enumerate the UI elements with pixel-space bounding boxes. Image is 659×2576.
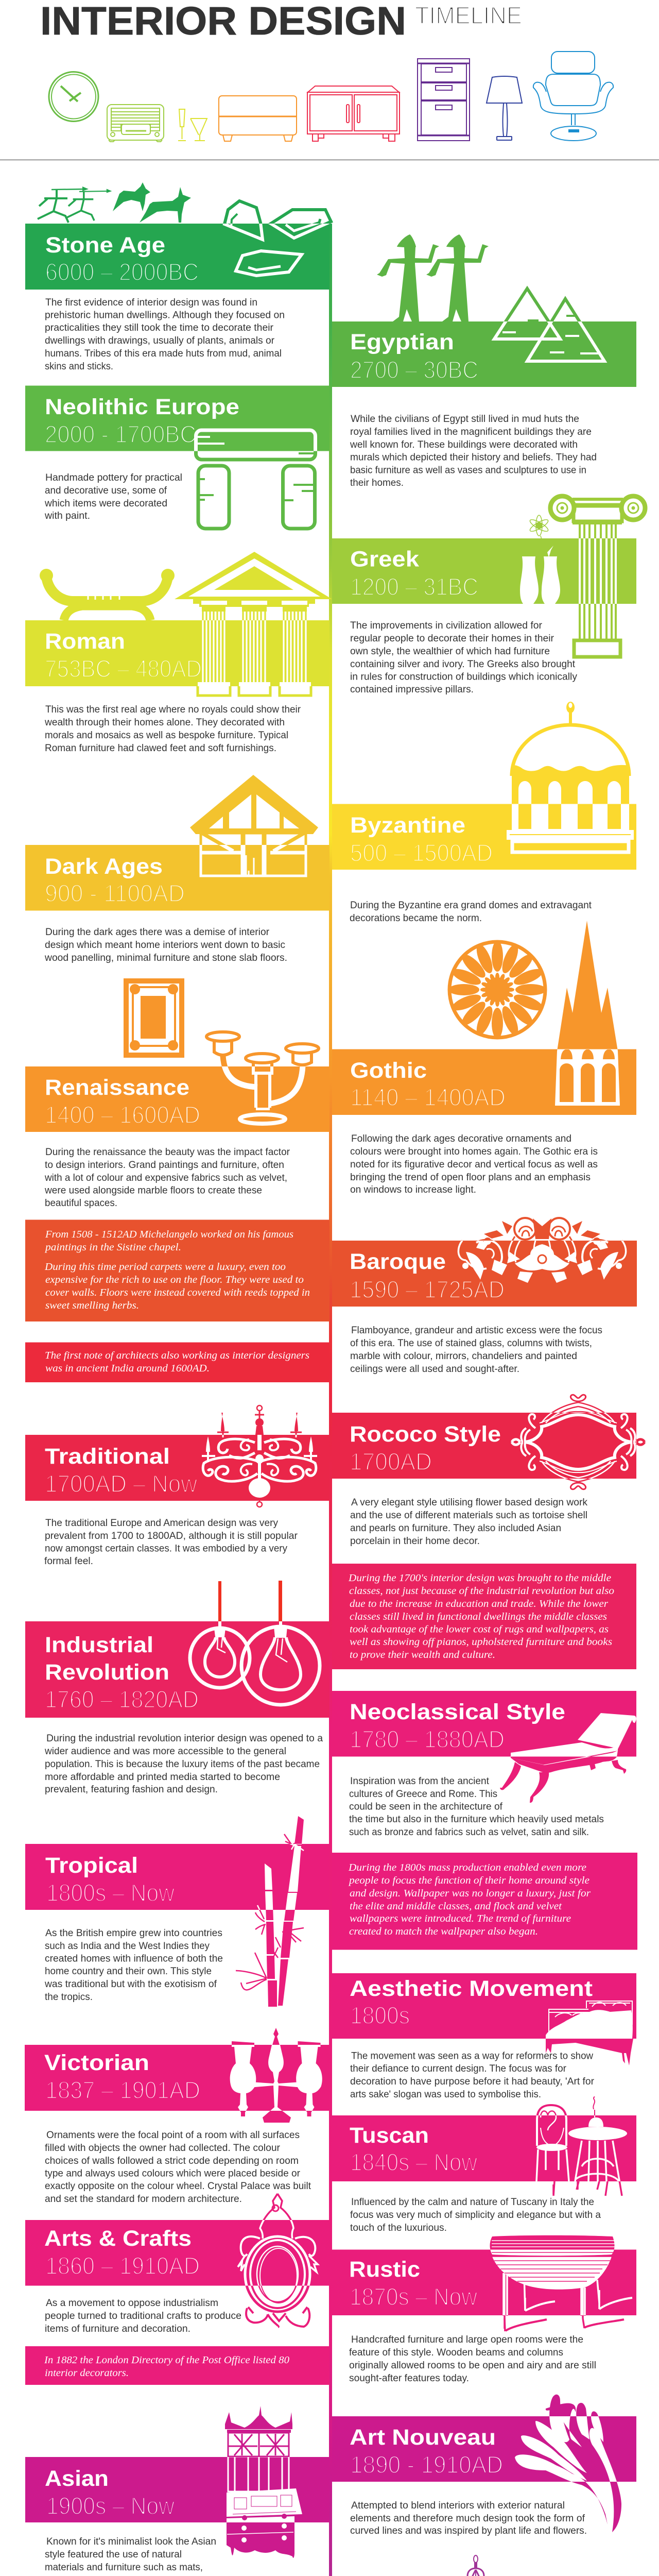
text: skins and sticks. (45, 361, 113, 372)
date: 2000 - 1700BC (45, 420, 196, 448)
text: and decorative use, some of (45, 485, 167, 496)
text: wealth through their homes alone. They decorated with (44, 717, 285, 728)
callout: 1700s middle classes: classes, not just because of the industrial revolution but also (349, 1585, 614, 1597)
icon: rustic table (490, 2235, 632, 2331)
text: to design interiors. Grand paintings and furniture, often (45, 1160, 284, 1171)
text (45, 2536, 216, 2576)
text: During the renaissance the beauty was the impact factor (45, 1147, 290, 1158)
text: regular people to decorate their homes in their (350, 633, 554, 644)
text: prevalent from 1700 to 1800AD, although it is still popular (45, 1531, 298, 1541)
text: prehistoric human dwellings. Although they focused on (45, 310, 285, 320)
callout: sistine chapel and carpets: paintings in the Sistine chapel. (44, 1242, 181, 1253)
panel: eclectic (332, 2555, 636, 2576)
heading: Rustic (349, 2257, 420, 2282)
callout: sistine chapel and carpets: From 1508 - 1512AD Michelangelo worked on his famous (45, 1229, 293, 1240)
band (332, 2115, 636, 2181)
text: own style, the wealthier of which had furniture (350, 646, 550, 657)
text: basic furniture as well as vases and sculptures to use in (350, 465, 586, 476)
text (44, 927, 287, 963)
text: formal feel. (44, 1556, 93, 1567)
icon: chandelier (202, 1405, 317, 1507)
date: 1780 – 1880AD (350, 1725, 505, 1753)
text: originally allowed rooms to be open and airy and are still (349, 2360, 596, 2371)
text: This was the first real age where no royals could show their (45, 704, 301, 715)
title: TIMELINE (415, 2, 522, 29)
text: During the dark ages there was a demise of interior (45, 927, 270, 938)
text (350, 620, 578, 695)
text: containing silver and ivory. The Greeks also brought (350, 659, 576, 670)
date: 1840s – Now (350, 2148, 478, 2176)
callout: 1800s mass production: people to focus the function of their home around style (348, 1875, 589, 1886)
callout: 1700s middle classes: took advantage of the lower cost of rugs and wallpapers, as (350, 1624, 609, 1635)
icon: filing cabinet (418, 59, 470, 141)
date: 753BC – 480AD (45, 655, 202, 682)
heading: Traditional (45, 1444, 170, 1469)
text: marble with colour, mirrors, chandeliers and painted (350, 1351, 577, 1362)
band (25, 1435, 330, 1501)
date: 1590 – 1725AD (350, 1276, 505, 1303)
text: practicalities they still took the time to decorate their (45, 323, 274, 333)
callout: 1800s mass production: and design. Wallpaper was no longer a luxury, just for (350, 1888, 591, 1899)
panel: roman (25, 552, 332, 754)
icon: roman stool (40, 569, 175, 620)
panel: tuscan (332, 2097, 636, 2233)
text: wider audience and was more accessible to the general (44, 1746, 286, 1757)
band (25, 224, 330, 290)
heading: Egyptian (350, 330, 454, 354)
icon: bed (546, 2001, 633, 2065)
callout: 1700s middle classes: classes still lived in functional dwellings the middle classes (350, 1611, 607, 1622)
text (44, 1928, 223, 2003)
panel: neoclassical style (332, 1691, 636, 1838)
band (332, 2249, 636, 2315)
date: 1860 – 1910AD (45, 2252, 200, 2279)
text (45, 2298, 241, 2334)
text: the time but also in the furniture which heavily used metals (349, 1814, 604, 1825)
heading: Renaissance (45, 1075, 189, 1100)
icon: radio (107, 105, 164, 142)
callout: 1700s middle classes: due to the increase in education and trade. While the lower (350, 1598, 608, 1609)
text: which items were decorated (44, 498, 167, 509)
text: Inspiration was from the ancient (350, 1776, 490, 1787)
heading: Asian (45, 2466, 109, 2491)
text: such as bronze and fabrics such as velvet, satin and silk. (349, 1827, 589, 1838)
date: 1700AD – Now (45, 1470, 198, 1497)
callout: architects in india (25, 1343, 330, 1382)
text: wood panelling, minimal furniture and stone slab floors. (44, 953, 287, 963)
text: and set the standard for modern architecture. (45, 2194, 242, 2205)
callout: sistine chapel and carpets: expensive for the rich to use on the floor. They were used to (45, 1274, 304, 1285)
text: their homes. (350, 478, 404, 488)
panel: tropical (25, 1816, 330, 2007)
panel: dark ages (25, 775, 330, 963)
text: porcelain in their home decor. (350, 1536, 480, 1547)
icon: baroque ornament (458, 1218, 626, 1283)
text: on windows to increase light. (350, 1184, 476, 1195)
text: decoration to have purpose before it had beauty, 'Art for (350, 2076, 595, 2087)
text: elements and therefore much design took the form of (350, 2513, 585, 2524)
icon: lamp (487, 76, 522, 140)
callout: 1700s middle classes: well as showing off pianos, upholstered furniture and books (350, 1636, 612, 1648)
heading: Revolution (45, 1660, 169, 1685)
callout: 1800s mass production: created to match the wallpaper also began. (349, 1926, 538, 1937)
panel: byzantine (332, 702, 636, 924)
band (332, 1973, 636, 2039)
text: of this era. The use of stained glass, columns with twists, (350, 1338, 592, 1349)
icon: hanging lamp (441, 2555, 608, 2576)
date: 1890 - 1910AD (350, 2451, 503, 2478)
icon: cabinet (307, 86, 400, 141)
icon: egyptian figures (377, 234, 489, 321)
heading: Baroque (350, 1249, 446, 1274)
icon: tuscan chair and table (536, 2097, 627, 2196)
icon: ionic column, vases and flower (520, 496, 645, 657)
text (350, 1497, 587, 1547)
text (350, 900, 592, 924)
icon: pyramids (494, 289, 604, 361)
band (332, 321, 636, 387)
text (349, 1776, 604, 1838)
panel: stone age (25, 182, 331, 372)
band (332, 1241, 637, 1307)
heading: Greek (350, 547, 419, 572)
panel: gothic (332, 921, 636, 1195)
band (332, 1049, 636, 1115)
text: was traditional but with the exotisism of (44, 1979, 217, 1990)
text: morals and mosaics as well as bespoke furniture. Typical (45, 730, 288, 741)
heading: Tropical (45, 1853, 138, 1878)
icon: gothic cathedral (555, 921, 620, 1106)
callout: 1800s mass production: wallpapers were introduced. The trend of furniture (350, 1913, 571, 1924)
panel: egyptian (332, 234, 636, 488)
callout: sistine chapel and carpets: cover walls. Floors were instead covered with reeds topped in (45, 1287, 310, 1298)
band (332, 1691, 636, 1757)
text: their defiance to current design. The focus was for (350, 2063, 567, 2074)
text: design which meant home interiors went down to basic (45, 940, 285, 951)
panel: industrial revolution (25, 1581, 330, 1795)
text: contained impressive pillars. (350, 684, 474, 695)
text: The improvements in civilization allowed for (350, 620, 543, 631)
timeline spine (329, 224, 332, 2576)
panel: rustic (332, 2235, 636, 2384)
text: Handmade pottery for practical (45, 472, 182, 483)
panel: aesthetic movement (332, 1973, 636, 2100)
date: 900 - 1100AD (45, 879, 185, 907)
text: Roman furniture had clawed feet and soft furnishings. (45, 743, 276, 754)
text: and the use of different materials such as tortoise shell (350, 1510, 587, 1521)
text: Following the dark ages decorative ornaments and (351, 1133, 571, 1144)
text: During the industrial revolution interior design was opened to a (46, 1733, 323, 1744)
icon: stones (224, 201, 331, 276)
icon: timber house (190, 775, 318, 876)
text: items of furniture and decoration. (45, 2324, 190, 2334)
panel: baroque (332, 1218, 637, 1375)
date: 1870s – Now (350, 2283, 478, 2310)
heading: Gothic (350, 1058, 427, 1083)
icon: hunters and deer (38, 182, 191, 223)
icon: art nouveau plume (515, 2395, 621, 2532)
text (350, 2500, 587, 2536)
text (44, 1518, 298, 1567)
text: murals which depicted their history and beliefs. They had (350, 452, 597, 463)
text: sought-after features today. (349, 2373, 469, 2384)
text: prevalent, featuring fashion and design. (45, 1784, 218, 1795)
icon: swivel chair (533, 52, 613, 141)
date: 500 – 1500AD (350, 839, 493, 867)
text: style featured the use of natural (45, 2549, 182, 2560)
icon: ottoman (219, 96, 297, 141)
date: 1800s – Now (46, 1879, 175, 1906)
band (25, 845, 330, 911)
heading: Aesthetic Movement (350, 1976, 593, 2001)
band (25, 385, 330, 451)
icon: ornate mirror (238, 2194, 318, 2327)
callout: architects in india: was in ancient India around 1600AD. (45, 1363, 210, 1374)
callout: sistine chapel and carpets: During this time period carpets were a luxury, even too (44, 1261, 286, 1273)
text: Ornaments were the focal point of a room with all surfaces (46, 2130, 300, 2141)
text: home country and their own. This style (45, 1966, 212, 1977)
text: decorations became the norm. (350, 913, 482, 924)
heading: Industrial (45, 1633, 153, 1657)
text (350, 414, 597, 488)
text: well known for. These buildings were decorated with (350, 439, 578, 450)
text: royal families lived in the magnificent buildings they are (350, 427, 592, 437)
text: Attempted to blend interiors with exterior natural (351, 2500, 565, 2511)
text: materials and furniture such as mats, (45, 2562, 203, 2573)
callout: london directory: interior decorators. (45, 2367, 129, 2379)
icon: glasses (178, 109, 207, 141)
date: 1140 – 1400AD (350, 1083, 506, 1111)
panel: arts and crafts (25, 2194, 330, 2334)
heading: Dark Ages (45, 854, 163, 879)
text: beautiful spaces. (45, 1198, 117, 1209)
text: feature of this style. Wooden beams and columns (349, 2347, 563, 2358)
band (25, 2045, 330, 2111)
date: 1900s – Now (46, 2492, 175, 2519)
date: 1760 – 1820AD (45, 1686, 199, 1713)
text: As the British empire grew into countries (45, 1928, 222, 1939)
icon: carpet (126, 981, 182, 1055)
text: with a lot of colour and expensive fabrics such as velvet, (44, 1173, 287, 1183)
heading: Art Nouveau (350, 2425, 496, 2450)
heading: Victorian (44, 2050, 149, 2075)
text: A very elegant style utilising flower based design work (351, 1497, 587, 1508)
heading (45, 1633, 169, 1685)
text: The first evidence of interior design was found in (45, 297, 257, 308)
text: were used alongside marble floors to create these (44, 1185, 262, 1196)
text (350, 2197, 601, 2233)
text: now amongst certain classes. It was embodied by a very (45, 1544, 287, 1554)
text: While the civilians of Egypt still lived in mud huts the (351, 414, 579, 425)
date: 1200 – 31BC (350, 573, 478, 600)
icon: hanging cords (218, 1581, 282, 1621)
text: dwellings with drawings, usually of plants, animals or (45, 335, 275, 346)
text: focus was very much of simplicity and elegance but with a (350, 2210, 601, 2221)
icon: rose window (448, 941, 546, 1039)
text: created homes with influence of both the (45, 1954, 223, 1964)
panel: asian (25, 2406, 330, 2576)
text: filled with objects the owner had collected. The colour (45, 2143, 281, 2154)
band (332, 2416, 636, 2482)
callout: london directory (25, 2346, 330, 2385)
text (44, 704, 301, 754)
icon: bamboo (236, 1816, 304, 2007)
heading: Roman (45, 629, 125, 654)
text: could be seen in the architecture of (349, 1801, 503, 1812)
icon: clock (49, 72, 98, 122)
panel: greek (332, 496, 645, 695)
date: 1400 – 1600AD (45, 1101, 200, 1128)
callout: architects in india: The first note of architects also working as interior designers (45, 1350, 309, 1361)
text: bringing the trend of open floor plans and an emphasis (350, 1172, 591, 1183)
text: humans. Tribes of this era made huts from mud, animal (45, 348, 282, 359)
callout: 1700s middle classes (332, 1564, 636, 1669)
icon: candelabra (206, 1032, 319, 1124)
callout: 1800s mass production (332, 1853, 637, 1950)
panel: neolithic europe (25, 385, 330, 529)
text: cultures of Greece and Rome. This (349, 1789, 497, 1800)
text: the tropics. (45, 1992, 93, 2003)
heading: Rococo Style (350, 1422, 501, 1447)
divider (0, 159, 659, 161)
band (25, 620, 330, 686)
icon: rococo frame (512, 1395, 645, 1489)
text: Flamboyance, grandeur and artistic excess were the focus (351, 1325, 602, 1336)
heading: Tuscan (350, 2123, 429, 2148)
icon: stonehenge (196, 430, 315, 529)
panel: victorian (25, 2028, 330, 2205)
panel: traditional (25, 1405, 330, 1567)
text: curved lines and was inspired by plant life and flowers. (350, 2526, 587, 2536)
text (350, 2050, 595, 2100)
band (25, 1844, 330, 1910)
text (44, 472, 182, 521)
text: Known for it's minimalist look the Asian (46, 2536, 216, 2547)
text: arts sake' slogan was used to symbolise this. (350, 2089, 541, 2100)
heading: Stone Age (45, 233, 165, 258)
text (349, 2334, 596, 2384)
heading: Neolithic Europe (45, 395, 239, 419)
text: and pearls on furniture. They also included Asian (350, 1523, 561, 1534)
text (44, 1147, 290, 1209)
callout: 1700s middle classes: During the 1700's interior design was brought to the middle (348, 1572, 611, 1584)
text: people turned to traditional crafts to produce (45, 2311, 241, 2321)
text: population. This is because the luxury items of the past became (45, 1759, 320, 1770)
text: noted for its figurative decor and vertical focus as well as (350, 1159, 598, 1170)
text: The movement was seen as a way for reformers to show (351, 2050, 593, 2062)
panel: renaissance (25, 981, 330, 1209)
heading: Arts & Crafts (44, 2226, 192, 2251)
header furniture icons (49, 52, 613, 142)
text (350, 1133, 598, 1195)
text: type and always used colours which were placed beside or (45, 2168, 301, 2179)
text: exactly opposite on the colour wheel. Crystal Palace was built (45, 2181, 311, 2192)
text (45, 2130, 311, 2205)
band (332, 804, 636, 870)
date: 1837 – 1901AD (45, 2076, 200, 2104)
date: 2700 – 30BC (350, 356, 478, 383)
text: with paint. (44, 511, 90, 521)
callout: 1800s mass production: During the 1800s mass production enabled even more (348, 1862, 586, 1873)
title: INTERIOR DESIGN (40, 0, 406, 43)
band (332, 538, 636, 604)
heading: Neoclassical Style (350, 1700, 565, 1724)
callout: 1700s middle classes: to prove their wealth and culture. (350, 1649, 495, 1660)
date: 6000 – 2000BC (45, 258, 199, 285)
band (25, 1066, 330, 1132)
band (25, 1621, 330, 1718)
callout: london directory: In 1882 the London Directory of the Post Office listed 80 (44, 2354, 289, 2366)
icon: asian cabinet (225, 2406, 302, 2558)
callout: 1800s mass production: the elite and middle classes, and flock and velvet (350, 1901, 562, 1912)
icon: roman temple (175, 552, 332, 696)
text: more affordable and printed media started to become (45, 1772, 280, 1783)
callout: sistine chapel and carpets: sweet smelling herbs. (45, 1300, 139, 1311)
text: in rules for construction of buildings which iconically (350, 672, 578, 682)
icon: light bulbs (190, 1621, 320, 1705)
panel: art nouveau (332, 2395, 636, 2536)
text: Influenced by the calm and nature of Tuscany in Italy the (351, 2197, 594, 2208)
text: such as India and the West Indies they (45, 1941, 210, 1952)
text: choices of walls followed a strict code depending on room (45, 2156, 299, 2166)
text (350, 1325, 602, 1375)
text: As a movement to oppose industrialism (46, 2298, 218, 2309)
date: 1700AD (350, 1448, 432, 1475)
icon: victorian candelabra (230, 2028, 322, 2123)
band (25, 2457, 330, 2522)
text (44, 1733, 323, 1795)
date: 1800s (350, 2002, 410, 2029)
heading: Byzantine (350, 813, 465, 838)
text: During the Byzantine era grand domes and extravagant (350, 900, 592, 911)
band (332, 1413, 636, 1479)
text (45, 297, 285, 372)
band (25, 2220, 330, 2285)
callout: sistine chapel and carpets (25, 1220, 330, 1321)
text: Handcrafted furniture and large open rooms were the (351, 2334, 583, 2345)
icon: byzantine dome (507, 702, 634, 852)
text: The traditional Europe and American design was very (45, 1518, 278, 1529)
text: touch of the luxurious. (350, 2223, 447, 2233)
icon: chaise longue (500, 1713, 636, 1803)
text: ceilings were all used and sought-after. (350, 1364, 519, 1375)
panel: rococo style (332, 1395, 645, 1547)
text: colours were brought into homes again. The Gothic era is (350, 1146, 598, 1157)
